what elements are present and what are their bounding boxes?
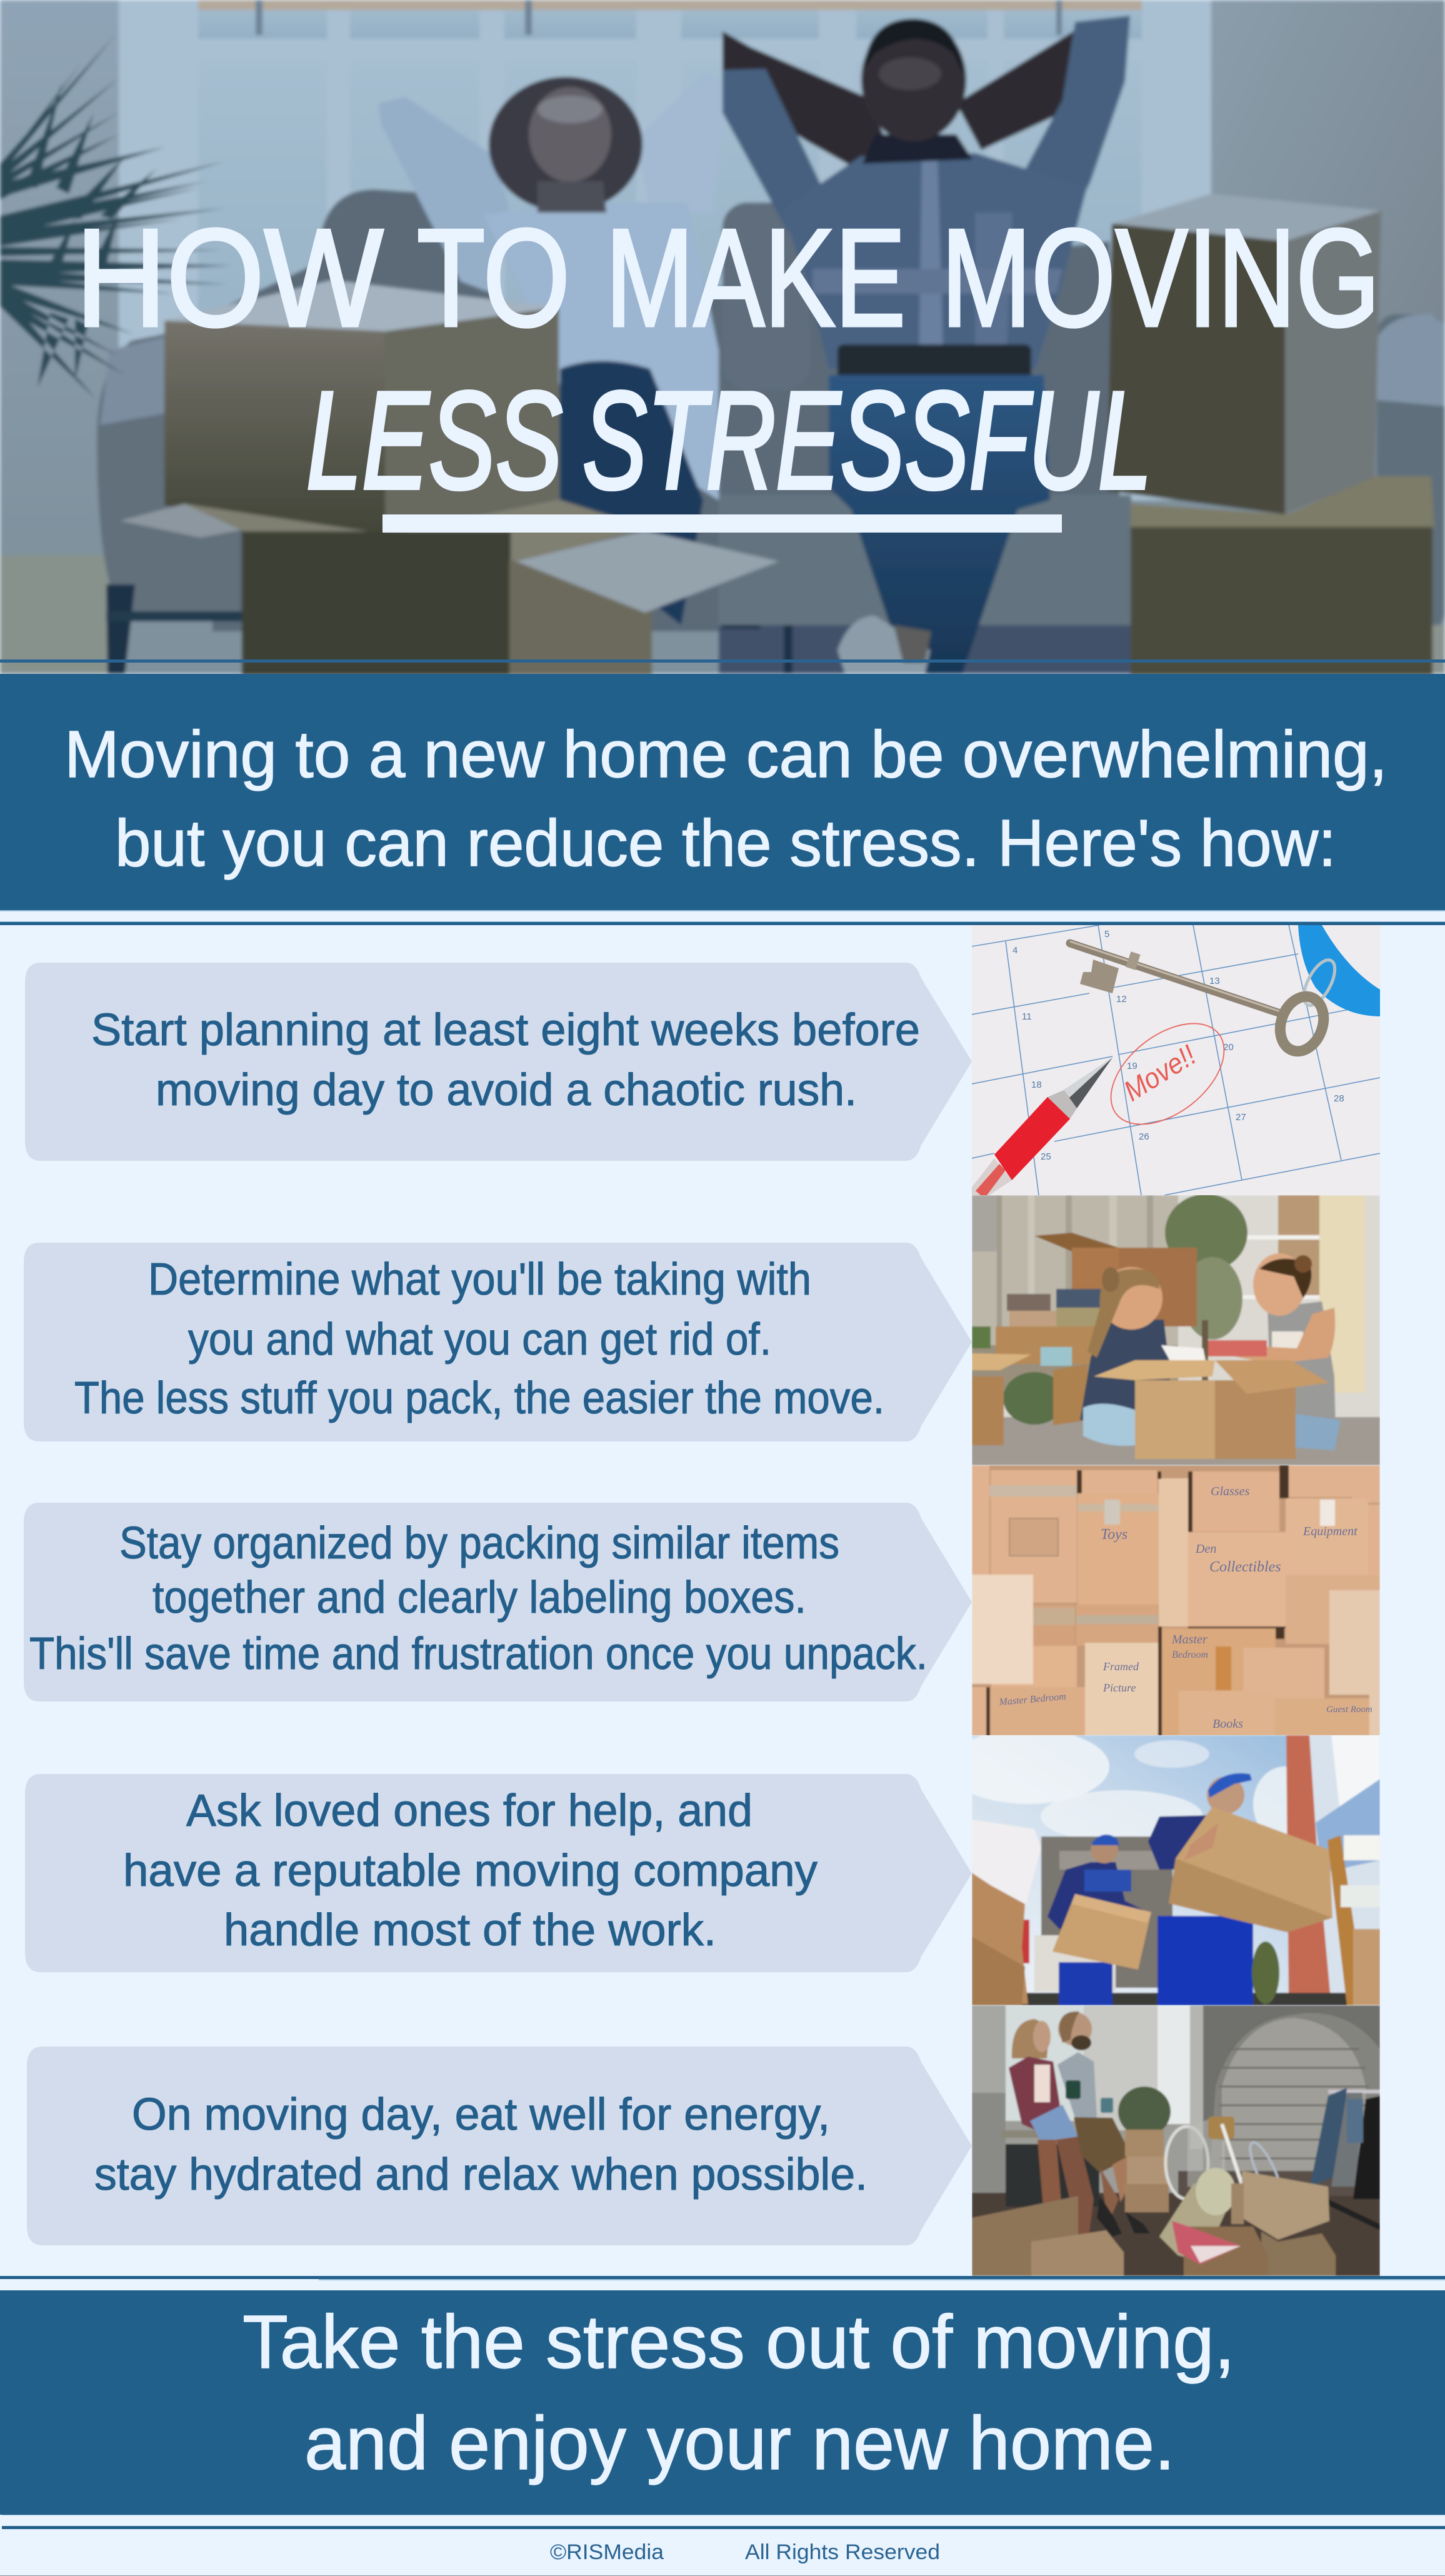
tip 2 text: The less stuff you pack, the easier the move. [74, 1373, 884, 1423]
title line 2: LESS [306, 363, 562, 518]
photo: stack of labeled cardboard boxes: Books [1212, 1717, 1243, 1731]
photo: calendar with key and pen: Move!! [1118, 1038, 1201, 1107]
boxes [164, 321, 385, 534]
palm plant [0, 34, 231, 400]
photo: calendar with key and pen: 20 [1223, 1042, 1234, 1053]
tip 1 text: Start planning at least eight weeks before [91, 1005, 920, 1055]
tip 3 text [29, 1518, 928, 1679]
man [722, 31, 894, 169]
tip 4 text: have a reputable moving company [123, 1846, 818, 1896]
sofa [212, 189, 1125, 631]
intro band [0, 674, 1445, 910]
closing text: and enjoy your new home. [304, 2400, 1175, 2485]
woman [1012, 2019, 1048, 2058]
rug [1159, 2183, 1234, 2262]
title line 1: HOW [76, 201, 383, 356]
tip 1 text: moving day to avoid a chaotic rush. [156, 1065, 857, 1115]
title underline [382, 514, 1062, 533]
hero photo: couple relaxing among moving boxes [0, 0, 1445, 674]
first mover [1148, 1815, 1222, 1870]
photo: stack of labeled cardboard boxes: Toys [1101, 1526, 1128, 1543]
hero rule [0, 659, 1445, 663]
man [1058, 2012, 1092, 2046]
title line 1 [76, 201, 1380, 356]
closing band rules [0, 2276, 1445, 2279]
photo: calendar with key and pen: 13 [1209, 976, 1220, 986]
intro text [64, 718, 1388, 880]
photo: stack of labeled cardboard boxes: Master [1171, 1633, 1208, 1646]
tip 4 text [123, 1786, 818, 1955]
tip 5 chevron [27, 2047, 972, 2245]
tip 4 chevron [25, 1774, 972, 1972]
tip 2 chevron [24, 1243, 972, 1441]
tip 5 text: On moving day, eat well for energy, [132, 2090, 830, 2140]
photo: stack of labeled cardboard boxes: Picture [1102, 1681, 1136, 1694]
photo: stack of labeled cardboard boxes [972, 1465, 1380, 1735]
tip 5 text: stay hydrated and relax when possible. [94, 2150, 868, 2200]
footer credit: ©RISMedia [550, 2540, 664, 2564]
hero title [76, 201, 1380, 533]
photo: calendar with key and pen: 18 [1031, 1080, 1042, 1090]
tip 3 text: Stay organized by packing similar items [119, 1518, 839, 1568]
tip 5 text [94, 2090, 868, 2200]
photo: calendar with key and pen: 11 [1022, 1011, 1032, 1022]
second mover [1048, 1862, 1150, 1929]
footer credit: All Rights Reserved [745, 2540, 940, 2564]
tip 1 chevron [25, 963, 972, 1161]
footer credit [550, 2540, 940, 2564]
photo: calendar with key and pen: 4 [1012, 945, 1018, 956]
title line 1: MAKE [606, 201, 906, 356]
tip 4 text: handle most of the work. [224, 1905, 716, 1955]
tip 3 text: together and clearly labeling boxes. [152, 1573, 806, 1623]
title line 1: TO [417, 201, 570, 356]
tip 2 text [74, 1255, 884, 1423]
photo: stack of labeled cardboard boxes: Bedroom [1172, 1650, 1208, 1660]
tip 3 text: This'll save time and frustration once you unpack. [29, 1629, 928, 1679]
photo: stack of labeled cardboard boxes: Guest Room [1326, 1705, 1372, 1715]
photo: stack of labeled cardboard boxes: Glasses [1211, 1485, 1249, 1498]
intro text: Moving to a new home can be overwhelming, [64, 718, 1388, 791]
photo: stack of labeled cardboard boxes: Master Bedroom [998, 1691, 1066, 1708]
photo: stack of labeled cardboard boxes: Den [1195, 1542, 1216, 1556]
photo: calendar with key and pen: 19 [1127, 1061, 1138, 1071]
photo: stack of labeled cardboard boxes: Equipment [1302, 1525, 1358, 1538]
photo: movers carrying boxes from a van [972, 1735, 1380, 2005]
boxes and plant [1118, 2087, 1171, 2137]
photo: stack of labeled cardboard boxes: Collectibles [1209, 1559, 1281, 1575]
photo: couple with coffee in new loft [972, 2005, 1380, 2276]
woman [378, 97, 509, 294]
photo: calendar with key and pen: 28 [1334, 1093, 1344, 1104]
title line 2: STRESSFUL [582, 363, 1152, 518]
closing text: Take the stress out of moving, [242, 2299, 1235, 2384]
photo: calendar with key and pen: 27 [1236, 1112, 1246, 1123]
tip 2 text: Determine what you'll be taking with [148, 1255, 811, 1305]
closing text [242, 2299, 1235, 2485]
closing band [0, 2290, 1445, 2515]
tip 4 text: Ask loved ones for help, and [186, 1786, 752, 1836]
photo: calendar with key and pen: 25 [1041, 1151, 1051, 1162]
title line 2 [306, 363, 1152, 518]
photo: calendar with key and pen: 12 [1116, 994, 1127, 1005]
intro text: but you can reduce the stress. Here's how: [115, 806, 1336, 880]
clothes rack [1328, 2090, 1380, 2093]
photo: calendar with key and pen [972, 925, 1380, 1195]
photo: stack of labeled cardboard boxes: Framed [1102, 1660, 1139, 1673]
photo: calendar with key and pen: 26 [1139, 1131, 1149, 1142]
photo: two women unpacking a box [972, 1195, 1380, 1465]
tip 3 chevron [24, 1503, 972, 1701]
photo: calendar with key and pen: 5 [1104, 929, 1109, 940]
tip 2 text: you and what you can get rid of. [188, 1315, 771, 1365]
shelf [1328, 1835, 1366, 2005]
floor boxes [972, 2196, 1078, 2276]
bicycle [1166, 2127, 1208, 2199]
tip 1 text [91, 1005, 920, 1115]
